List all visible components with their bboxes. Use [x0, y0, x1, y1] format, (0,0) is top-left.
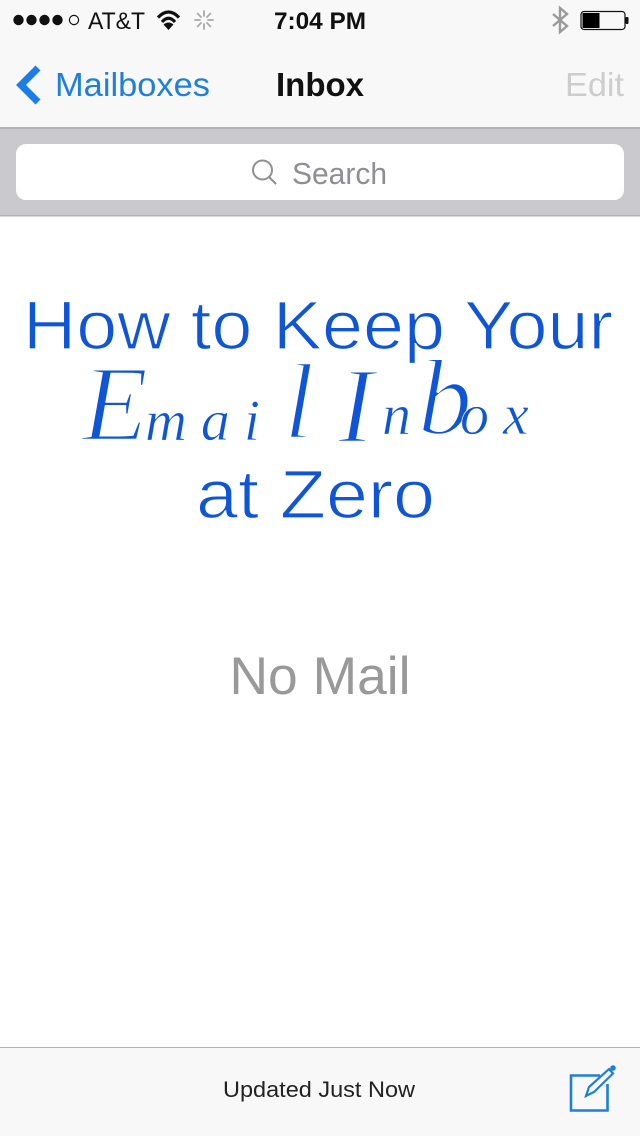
title line 2: script: I — [337, 347, 379, 466]
icon: magnifier — [253, 160, 276, 184]
icon: compose — [571, 1065, 616, 1110]
empty state: No Mail: No Mail — [230, 647, 410, 706]
icon: activity spinner — [195, 11, 213, 29]
search field — [16, 144, 624, 200]
title line 2: script: l — [284, 343, 314, 462]
title line 2: script: b — [418, 339, 472, 458]
search placeholder: Search — [292, 156, 387, 191]
nav action: Edit: Edit — [565, 66, 624, 103]
status text: Updated Just Now — [223, 1077, 415, 1102]
clock: 7:04 PM — [274, 8, 366, 35]
title — [23, 287, 613, 533]
icon: signal dots — [13, 15, 79, 25]
icon: battery — [581, 12, 628, 30]
title line 1: How to Keep Your — [23, 287, 613, 364]
icon: back chevron — [21, 68, 38, 102]
title line 2: script: mai — [145, 388, 274, 453]
icon: wifi — [158, 12, 179, 30]
nav title: Inbox: Inbox — [276, 66, 365, 103]
bottom toolbar — [0, 1047, 640, 1136]
top navigation panel — [0, 0, 640, 129]
back link: Mailboxes: Mailboxes — [55, 66, 210, 103]
title line 2: script: E — [80, 345, 148, 464]
carrier label: AT&T — [88, 8, 145, 35]
search panel — [0, 129, 640, 216]
title line 2: script: n — [382, 382, 411, 447]
title line 2: script: ox — [460, 382, 543, 447]
title line 3: at Zero — [196, 456, 435, 533]
icon: bluetooth — [553, 8, 567, 32]
